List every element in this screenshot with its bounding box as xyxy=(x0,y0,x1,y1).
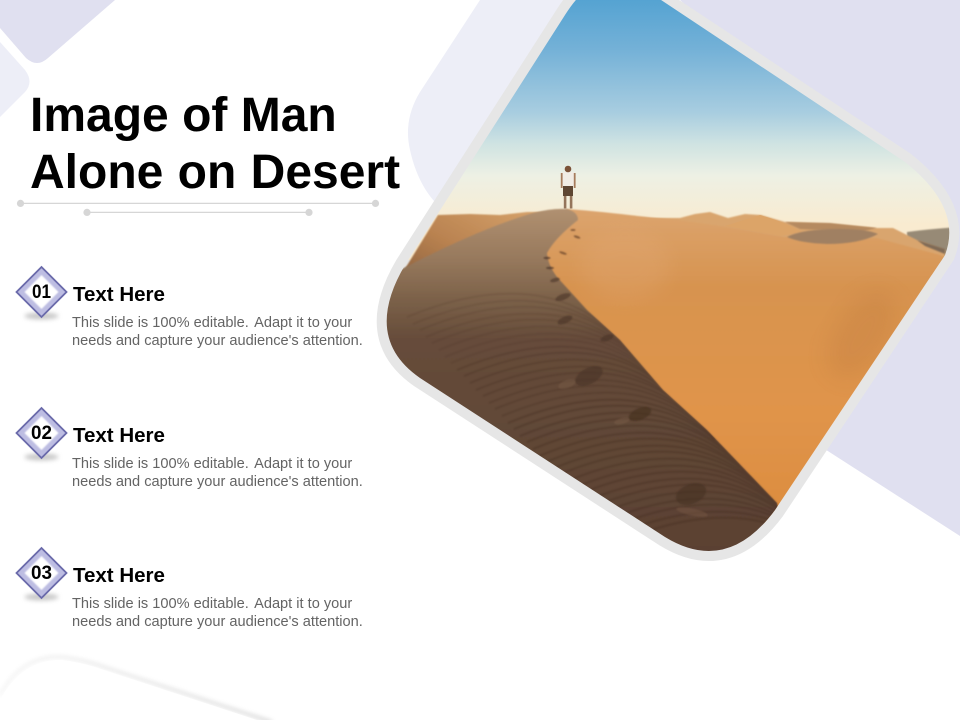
body 01: needs and capture your audience's attention. xyxy=(72,333,363,349)
heading 02: Text Here xyxy=(73,424,165,447)
dip in dunes at right xyxy=(787,229,878,244)
heading 03: Text Here xyxy=(73,564,165,587)
background shape: dark lavender tile behind photo xyxy=(680,0,960,536)
man standing on dune xyxy=(561,166,576,208)
title xyxy=(30,89,400,199)
darker patch on lit dune xyxy=(840,309,882,364)
body 01 xyxy=(72,315,363,349)
background shape: soft white tile bottom-left xyxy=(0,657,272,720)
badge 03: 03 xyxy=(31,563,52,584)
photo frame xyxy=(387,0,949,551)
sand ripples xyxy=(509,319,778,530)
body 03: This slide is 100% editable. Adapt it to your xyxy=(72,596,352,612)
middle ripples xyxy=(634,365,715,438)
body 01: This slide is 100% editable. Adapt it to your xyxy=(72,315,352,331)
footprints xyxy=(544,229,710,519)
pale glow on lit dune near crest xyxy=(592,253,658,292)
background shape: dark lavender top-left tile xyxy=(0,0,115,63)
lit dune face xyxy=(547,208,944,524)
body 03: needs and capture your audience's attention. xyxy=(72,614,363,630)
badge 02 xyxy=(16,408,66,460)
item 03 xyxy=(16,548,363,630)
body 02 xyxy=(72,456,363,490)
lower ripples xyxy=(509,399,778,530)
body 03 xyxy=(72,596,363,630)
body 02: This slide is 100% editable. Adapt it to your xyxy=(72,456,352,472)
shadowed dune face xyxy=(386,208,778,551)
title: Alone on Desert xyxy=(30,146,400,199)
badge 02: 02 xyxy=(31,423,52,444)
body 02: needs and capture your audience's attention. xyxy=(72,474,363,490)
background shape: light lavender tile behind photo xyxy=(408,0,580,215)
heading 01: Text Here xyxy=(73,283,165,306)
left back dune xyxy=(394,211,541,286)
badge 01: 01 xyxy=(32,282,51,303)
sky xyxy=(370,0,960,260)
photo: man alone on desert xyxy=(370,0,960,570)
faint upper ripples xyxy=(596,319,643,367)
item 01 xyxy=(16,267,363,349)
badge 03 xyxy=(16,548,66,600)
badge 01 xyxy=(16,267,66,320)
background shape: light lavender left tile xyxy=(0,42,30,117)
item 02 xyxy=(16,408,363,490)
distant dunes xyxy=(640,212,960,275)
title divider lines xyxy=(17,200,379,216)
title: Image of Man xyxy=(30,89,337,142)
